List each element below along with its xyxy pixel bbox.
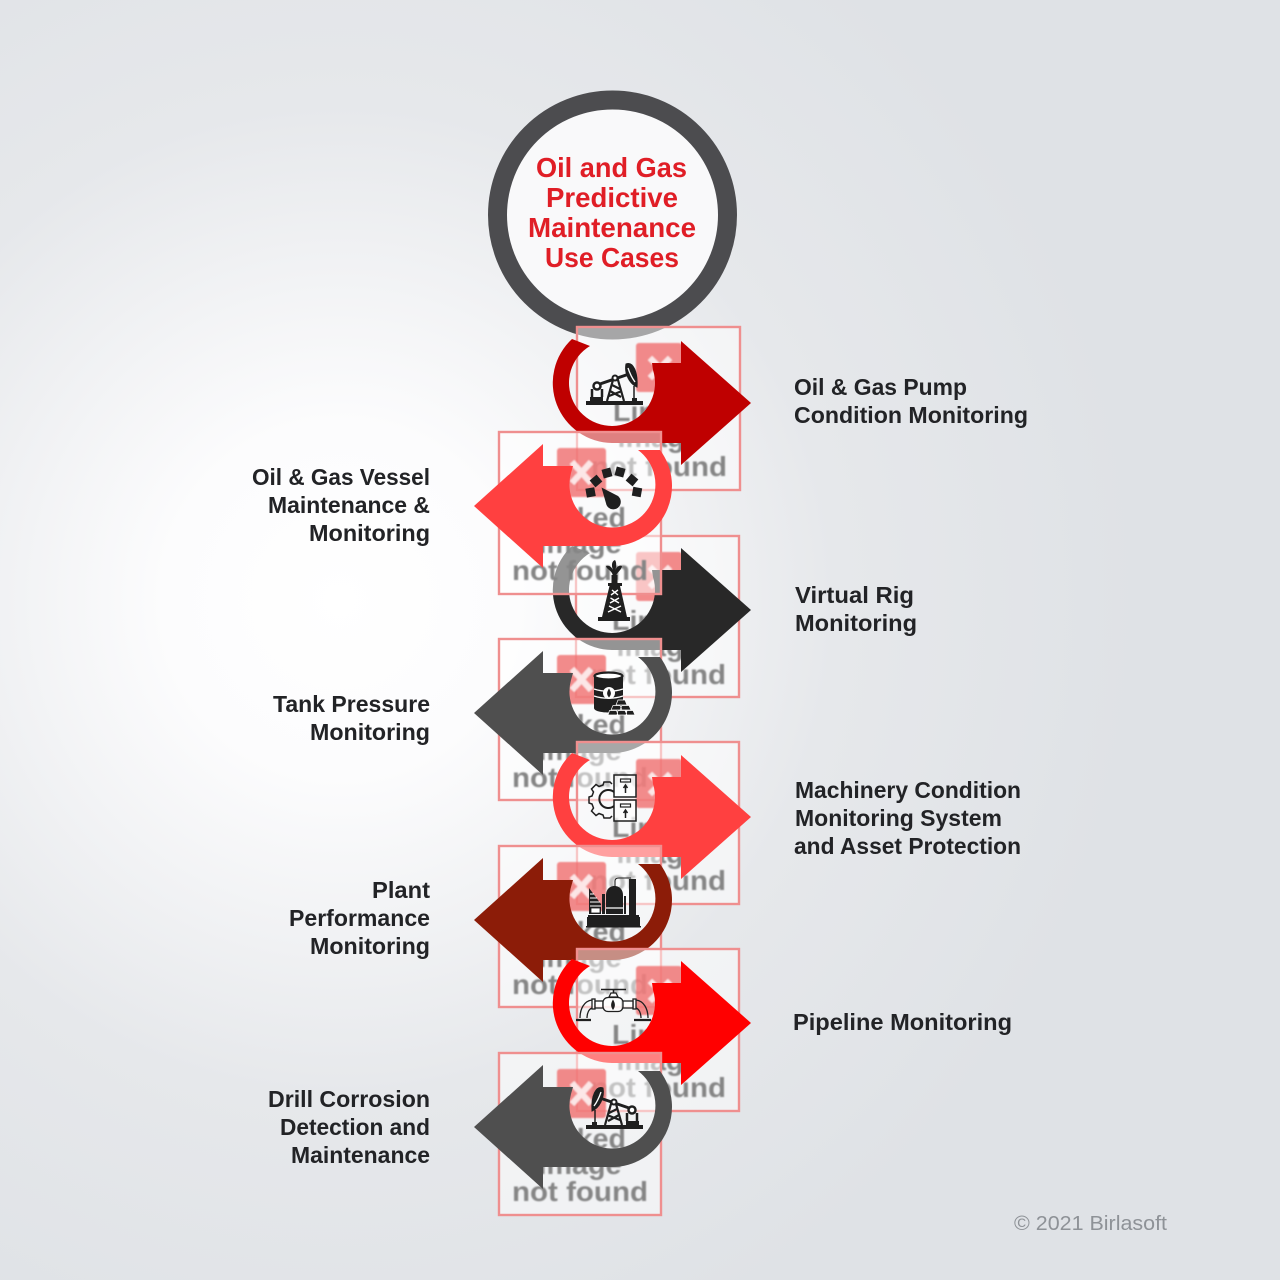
title: Use Cases <box>545 242 679 273</box>
label: Oil & Gas Vessel Maintenance & Monitoring: Monitoring <box>309 520 430 546</box>
label: Plant Performance Monitoring: Performance <box>289 905 430 931</box>
placeholder box 3 <box>576 536 739 697</box>
placeholder box 6: image <box>538 942 622 973</box>
placeholder box 5: image <box>616 838 700 869</box>
placeholder box 4 <box>499 639 661 800</box>
placeholder box 8: not found <box>512 1176 648 1207</box>
title: Maintenance <box>528 212 696 243</box>
icon: gear with boxes <box>589 775 636 821</box>
arrow 7: red right <box>553 959 751 1085</box>
placeholder box 2: Linked <box>534 502 626 533</box>
placeholder box 4: not found <box>512 762 648 793</box>
label: Tank Pressure Monitoring <box>273 691 430 745</box>
label: Plant Performance Monitoring <box>289 877 430 959</box>
placeholder box 2: not found <box>512 555 648 586</box>
placeholder box 3: Linked <box>612 605 704 636</box>
placeholder box 8 <box>499 1053 661 1215</box>
placeholder box 5 <box>577 742 739 904</box>
placeholder box 6 <box>499 846 661 1007</box>
arrow 5: light red right <box>553 753 751 879</box>
icon: barrel and gold bars <box>594 672 635 715</box>
arrow 3: black right <box>553 546 751 672</box>
placeholder box 7: Linked <box>612 1019 704 1050</box>
arrow 8: grey left <box>474 1065 672 1189</box>
arrow 6: brown left <box>474 858 672 982</box>
placeholder box 3: image <box>616 631 700 662</box>
placeholder box 3: not found <box>590 659 726 690</box>
label: Machinery Condition Monitoring System and Asset Protection: Monitoring System <box>795 805 1002 831</box>
label: Oil & Gas Vessel Maintenance & Monitoring: Oil & Gas Vessel <box>252 464 430 490</box>
label: Oil & Gas Pump Condition Monitoring: Oil & Gas Pump <box>794 374 967 400</box>
arrow 1: dark red right <box>553 339 751 465</box>
label: Tank Pressure Monitoring: Monitoring <box>310 719 430 745</box>
label: Oil & Gas Pump Condition Monitoring: Condition Monitoring <box>794 402 1028 428</box>
label: Virtual Rig Monitoring <box>795 582 917 636</box>
placeholder box 1: image <box>618 422 700 453</box>
label: Plant Performance Monitoring: Monitoring <box>310 933 430 959</box>
placeholder box 1: Linked <box>613 396 705 427</box>
placeholder box 2 <box>499 432 661 594</box>
label: Drill Corrosion Detection and Maintenance: Detection and <box>280 1114 430 1140</box>
label: Machinery Condition Monitoring System and Asset Protection <box>794 777 1021 859</box>
icon: pump jack mirrored <box>586 1088 643 1129</box>
label: Drill Corrosion Detection and Maintenance: Maintenance <box>291 1142 430 1168</box>
placeholder box 8: Linked <box>534 1123 626 1154</box>
placeholder box 7: image <box>616 1045 700 1076</box>
label: Oil & Gas Vessel Maintenance & Monitoring <box>252 464 430 546</box>
placeholder box 6: not found <box>512 969 648 1000</box>
label: Oil & Gas Vessel Maintenance & Monitoring: Maintenance & <box>268 492 430 518</box>
label: Tank Pressure Monitoring: Tank Pressure <box>273 691 430 717</box>
icon: gauge <box>585 466 642 509</box>
placeholder box 4: image <box>538 735 622 766</box>
title circle <box>498 100 728 330</box>
label: Pipeline Monitoring: Pipeline Monitoring <box>793 1009 1012 1035</box>
placeholder box 1: not found <box>591 451 727 482</box>
placeholder box 7 <box>577 949 739 1111</box>
placeholder box 5: not found <box>590 865 726 896</box>
placeholder box 5: Linked <box>612 812 704 843</box>
icon: pump jack <box>586 364 643 405</box>
label: Drill Corrosion Detection and Maintenance <box>268 1086 430 1168</box>
title: Oil and Gas <box>536 152 687 183</box>
placeholder box 8: image <box>538 1149 622 1180</box>
placeholder box 1 <box>577 327 740 490</box>
title <box>528 152 696 273</box>
label: Drill Corrosion Detection and Maintenance: Drill Corrosion <box>268 1086 430 1112</box>
placeholder box 4: Linked <box>534 709 626 740</box>
label: Virtual Rig Monitoring: Monitoring <box>795 610 917 636</box>
placeholder box 2: image <box>538 528 622 559</box>
label: Virtual Rig Monitoring: Virtual Rig <box>795 582 914 608</box>
label: Plant Performance Monitoring: Plant <box>372 877 430 903</box>
arrow 2: light red left <box>474 444 672 568</box>
label: Machinery Condition Monitoring System and Asset Protection: Machinery Condition <box>795 777 1021 803</box>
placeholder box 7: not found <box>590 1072 726 1103</box>
icon: pipeline valve <box>576 990 651 1020</box>
icon: oil derrick <box>598 560 630 621</box>
arrow 4: grey left <box>474 651 672 775</box>
label: Oil & Gas Pump Condition Monitoring <box>794 374 1028 428</box>
copyright: © 2021 Birlasoft <box>1014 1213 1167 1235</box>
placeholder box 6: Linked <box>534 916 626 947</box>
icon: refinery <box>586 878 641 928</box>
title: Predictive <box>546 182 678 213</box>
label: Machinery Condition Monitoring System and Asset Protection: and Asset Protection <box>794 833 1021 859</box>
